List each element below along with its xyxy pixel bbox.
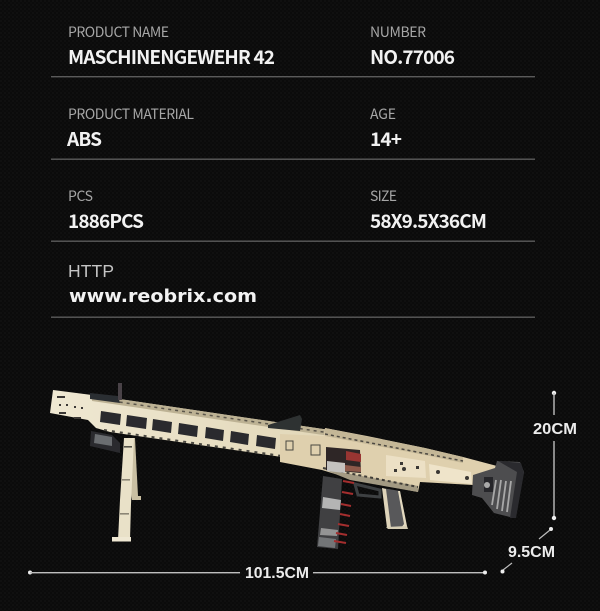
spec: age	[370, 104, 402, 152]
spec: pcs	[68, 186, 144, 234]
spec: website	[68, 261, 257, 307]
front sight	[268, 415, 302, 431]
spec: number	[370, 22, 455, 70]
spec: product name	[68, 22, 275, 70]
label: pcs: PCS	[68, 186, 93, 206]
dimension: length 101.5cm	[28, 565, 487, 582]
shoulder stock	[472, 461, 524, 518]
label: number: NUMBER	[370, 22, 426, 42]
dimension: depth 9.5cm	[500, 527, 555, 574]
spec: product material	[66, 104, 194, 152]
value: number: NO.77006	[370, 43, 455, 70]
label: age: AGE	[370, 104, 396, 124]
label: http: HTTP	[68, 261, 114, 281]
value: pcs: 1886PCS	[68, 207, 144, 234]
value: product material: ABS	[66, 125, 102, 152]
bipod legs	[112, 438, 141, 542]
pistol grip	[382, 488, 408, 529]
label: 20cm: 20CM	[533, 421, 577, 438]
value: website url: www.reobrix.com	[69, 287, 257, 307]
dimension: height 20cm	[533, 391, 577, 520]
spec: size	[370, 186, 487, 234]
receiver	[280, 428, 497, 492]
label: product material: PRODUCT MATERIAL	[68, 104, 194, 124]
machine gun model	[50, 383, 524, 549]
trigger guard	[355, 484, 380, 497]
label: 9.5cm: 9.5CM	[508, 544, 555, 561]
value: size: 58X9.5X36CM	[370, 207, 487, 234]
rear sight	[90, 383, 122, 403]
barrel jacket	[50, 390, 330, 464]
value: product name: MASCHINENGEWEHR 42	[68, 43, 275, 70]
barrel cooling slots	[100, 411, 276, 449]
value: age: 14+	[370, 125, 402, 152]
ammo belt	[317, 476, 354, 549]
label: size: SIZE	[370, 186, 397, 206]
bipod mount block	[90, 431, 120, 453]
label: 101.5cm: 101.5CM	[245, 565, 309, 582]
label: product name: PRODUCT NAME	[68, 22, 169, 42]
